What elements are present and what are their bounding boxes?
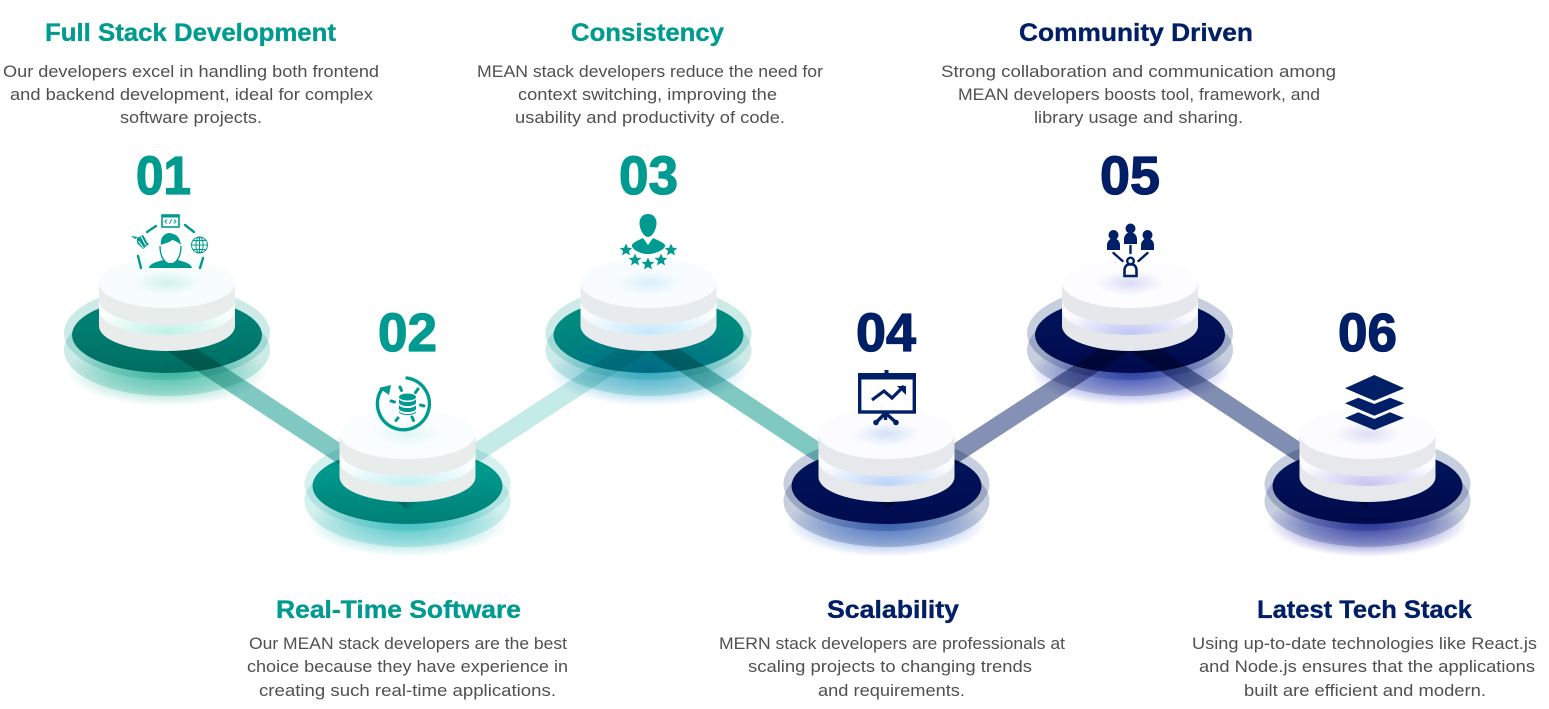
connector 04 to 05 (887, 329, 1130, 509)
number: 03 (619, 146, 678, 206)
description: choice because they have experience in (247, 658, 568, 676)
heading: Community Driven (1019, 19, 1253, 47)
description: creating such real-time applications. (259, 682, 556, 700)
icon: presentation board with growth chart (858, 370, 916, 425)
description: MEAN developers boosts tool, framework, and (958, 86, 1320, 104)
heading: Full Stack Development (45, 19, 337, 47)
description (941, 63, 1336, 127)
stacked disk (1300, 409, 1436, 502)
panel: step 01 full stack development (3, 19, 379, 351)
description: library usage and sharing. (1034, 109, 1243, 127)
stacked disk (580, 258, 716, 351)
description: Strong collaboration and communication among (941, 63, 1336, 81)
number: 06 (1338, 303, 1397, 363)
icon: community group (1107, 224, 1154, 276)
icon: layered stack (1345, 375, 1404, 430)
panel: step 02 real-time software (247, 303, 568, 700)
connector 02 to 03 (407, 329, 649, 509)
stacked disk (1062, 258, 1198, 351)
description: and requirements. (818, 682, 965, 700)
panel: step 04 scalability (719, 303, 1065, 700)
description: built are efficient and modern. (1244, 682, 1486, 700)
description: scaling projects to changing trends (748, 658, 1032, 676)
platform base 2 (304, 437, 510, 557)
panel: step 06 latest tech stack (1192, 303, 1537, 700)
platform base 5 (1027, 286, 1233, 406)
description (719, 635, 1065, 700)
description (477, 63, 824, 127)
description: Using up-to-date technologies like React.js (1192, 635, 1537, 653)
description: context switching, improving the (518, 86, 777, 104)
description: MERN stack developers are professionals at (719, 635, 1065, 653)
platform base 4 (784, 437, 990, 557)
platform base 6 (1264, 437, 1470, 557)
number: 02 (378, 303, 437, 363)
stacked disk (340, 409, 476, 502)
stacked disk (818, 409, 954, 502)
description: MEAN stack developers reduce the need for (477, 63, 824, 81)
description (247, 635, 568, 700)
icon: real-time database cycle (377, 378, 429, 430)
description: Our developers excel in handling both frontend (3, 63, 379, 81)
heading: Real-Time Software (276, 596, 521, 624)
number: 04 (856, 303, 916, 363)
number: 05 (1100, 146, 1160, 206)
description: and Node.js ensures that the applications (1199, 658, 1535, 676)
description: software projects. (120, 109, 262, 127)
platform base 3 (546, 286, 752, 406)
connector 05 to 06 (1130, 329, 1368, 509)
icon: expert with five stars (620, 214, 677, 269)
description: Our MEAN stack developers are the best (249, 635, 567, 653)
icon: developer with tools (131, 214, 208, 268)
connector 01 to 02 (167, 329, 407, 509)
description: and backend development, ideal for complex (10, 86, 374, 104)
heading: Consistency (571, 19, 724, 47)
description (1192, 635, 1537, 700)
heading: Scalability (827, 596, 959, 624)
stacked disk (99, 258, 235, 351)
connector 03 to 04 (649, 329, 887, 509)
number: 01 (136, 146, 191, 206)
description: usability and productivity of code. (515, 109, 785, 127)
platform base 1 (64, 286, 270, 406)
panel: step 05 community driven (941, 19, 1336, 351)
panel: step 03 consistency (477, 19, 824, 351)
heading: Latest Tech Stack (1257, 596, 1472, 624)
description (3, 63, 379, 127)
